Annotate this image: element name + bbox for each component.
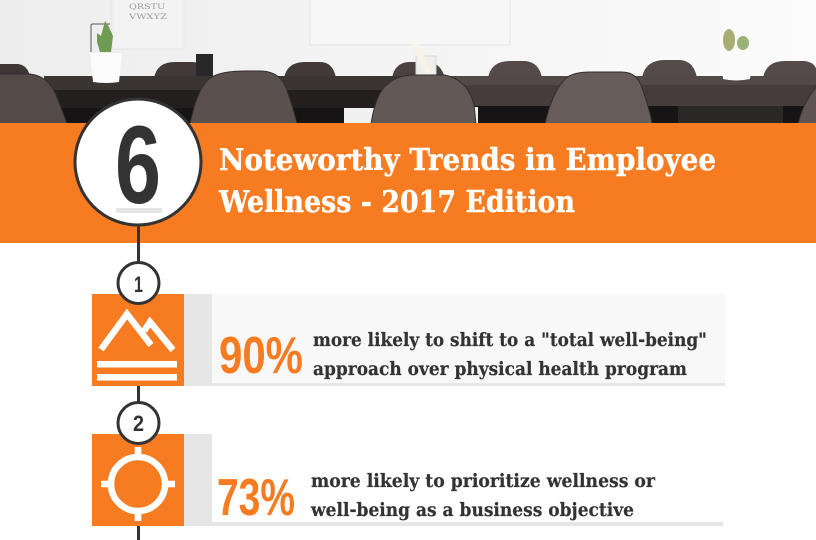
number circle 1 <box>118 262 159 304</box>
statistic: 90%: 90% <box>219 327 303 385</box>
number circle 2: 2 <box>133 411 144 436</box>
statistic: 73%: 73% <box>217 469 295 527</box>
row 2 <box>92 402 723 527</box>
icon: mountains <box>92 294 184 386</box>
header banner <box>0 123 816 243</box>
icon: right plant <box>720 29 753 80</box>
row 1 text: approach over physical health program <box>313 359 687 380</box>
icon: speaker <box>196 54 213 78</box>
title: Noteworthy Trends in Employee <box>219 143 716 178</box>
panel: row 2 background <box>184 434 723 526</box>
header photo: meeting room: VWXYZ <box>128 13 167 21</box>
number circle 2 <box>118 402 159 444</box>
title <box>218 143 716 220</box>
header photo: meeting room <box>0 0 816 124</box>
row 2 text: well-being as a business objective <box>310 500 634 521</box>
front chairs <box>0 71 816 124</box>
number circle 1: 1 <box>134 272 143 297</box>
big number badge: 6 <box>115 104 161 227</box>
icon: pen cup <box>411 43 436 75</box>
row 1 <box>92 262 725 386</box>
panel: row 1 background <box>184 294 725 386</box>
title: Wellness - 2017 Edition <box>218 185 575 220</box>
timeline connector <box>137 225 140 540</box>
row 2 text: more likely to prioritize wellness or <box>311 471 655 492</box>
icon: target <box>92 434 184 526</box>
icon: left plant <box>90 21 122 83</box>
big number badge <box>75 99 201 227</box>
row 2 text <box>310 471 655 521</box>
header photo: meeting room: QRSTU <box>129 3 165 11</box>
row 1 text: more likely to shift to a "total well-being" <box>313 330 707 351</box>
row 1 text <box>313 330 707 380</box>
